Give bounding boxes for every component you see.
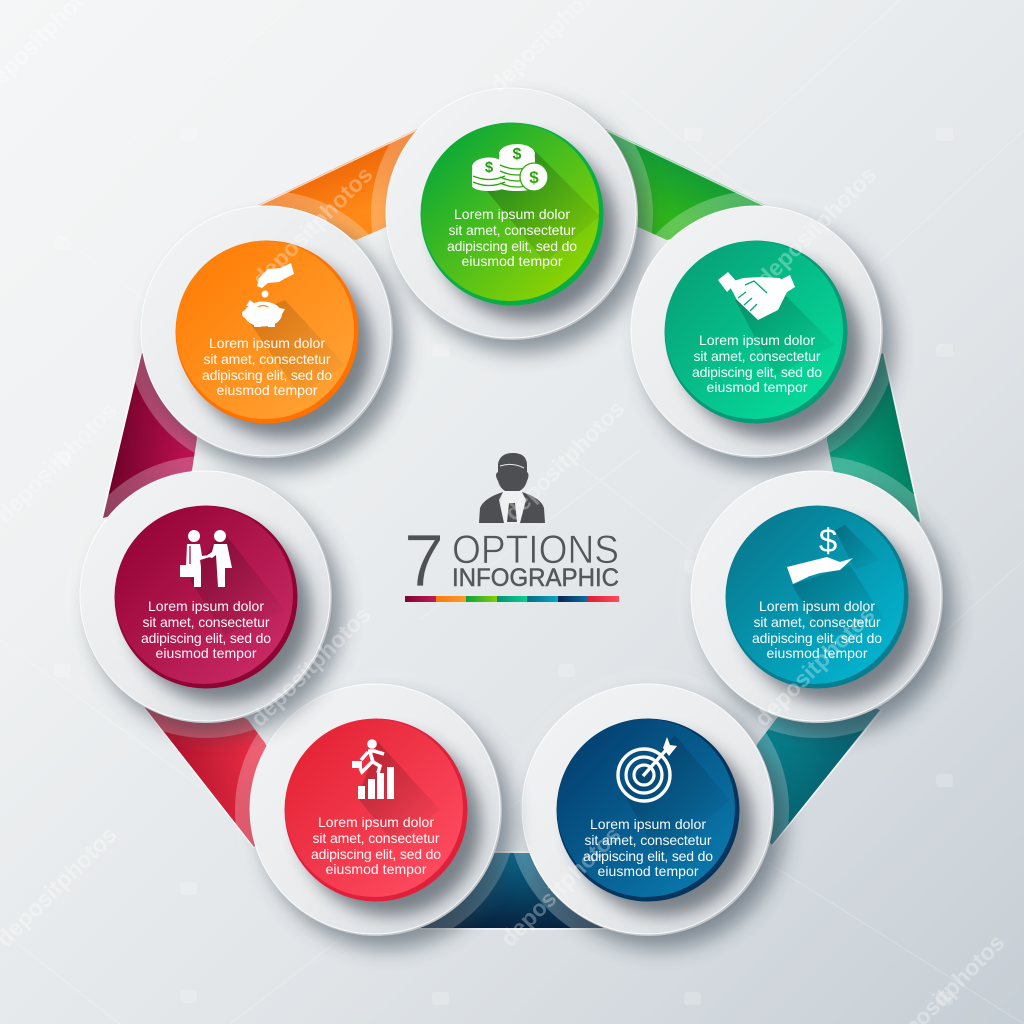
watermark: depositphotos <box>749 601 880 732</box>
ribbon: green <box>590 129 765 240</box>
icon: handshake <box>718 272 835 375</box>
text: orange: eiusmod tempor <box>216 382 318 398</box>
text: green: adipiscing elit, sed do <box>447 238 577 254</box>
text: orange: Lorem ipsum dolor <box>209 335 325 351</box>
text: crimson: sit amet, consectetur <box>142 614 270 630</box>
ribbon: teal <box>827 353 920 522</box>
ribbon: crimson <box>103 353 197 518</box>
text: cyan: eiusmod tempor <box>766 645 868 661</box>
icon: two businessmen shaking hands <box>180 530 285 635</box>
option: green money <box>386 88 649 353</box>
watermark: depositphotos <box>245 601 376 732</box>
text: teal: eiusmod tempor <box>706 379 808 395</box>
option: teal handshake <box>631 206 894 471</box>
text: red: sit amet, consectetur <box>312 830 440 846</box>
text: crimson: Lorem ipsum dolor <box>148 598 264 614</box>
icon: hand dropping coin into piggy bank <box>242 263 345 395</box>
ribbon: orange <box>258 129 440 240</box>
text: blue: Lorem ipsum dolor <box>590 816 706 832</box>
text: teal: sit amet, consectetur <box>694 348 821 364</box>
center title block <box>404 453 619 602</box>
ribbon segments of the heptagon <box>103 129 920 928</box>
icon: coin stacks: $ <box>513 146 522 163</box>
text: cyan: sit amet, consectetur <box>754 614 881 630</box>
text: crimson: adipiscing elit, sed do <box>141 630 271 646</box>
option: crimson partners <box>80 471 343 736</box>
ribbon: blue <box>420 853 610 928</box>
text: green: eiusmod tempor <box>462 253 563 269</box>
text: green: Lorem ipsum dolor <box>454 206 570 222</box>
ribbon: red <box>145 690 290 847</box>
option: red growth <box>250 684 513 949</box>
text: teal: Lorem ipsum dolor <box>699 332 815 348</box>
text: blue: adipiscing elit, sed do <box>583 848 713 864</box>
heading number: 7 <box>404 519 444 602</box>
text: orange: sit amet, consectetur <box>204 351 331 367</box>
icon: hand with dollar <box>787 522 885 640</box>
icon: running man on bars <box>352 739 440 845</box>
ribbon: cyan <box>730 690 880 845</box>
text: red: Lorem ipsum dolor <box>318 814 434 830</box>
icon: target with arrow <box>618 735 730 860</box>
colour strip <box>405 596 619 602</box>
heading: OPTIONS: OPTIONS <box>452 528 619 572</box>
icon: coin stacks <box>472 144 600 262</box>
icon: businessman <box>479 453 545 523</box>
option: orange savings <box>141 206 404 471</box>
text: cyan: Lorem ipsum dolor <box>759 598 875 614</box>
text: cyan: adipiscing elit, sed do <box>752 630 882 646</box>
text: blue: eiusmod tempor <box>598 863 699 879</box>
text: teal: adipiscing elit, sed do <box>692 364 822 380</box>
heading: INFOGRAPHIC: INFOGRAPHIC <box>452 564 619 592</box>
option: cyan giving hand <box>691 471 954 736</box>
icon: coin stacks: $ <box>529 168 539 187</box>
watermark: depositphotos <box>751 161 882 292</box>
text: red: eiusmod tempor <box>326 861 427 877</box>
text: red: adipiscing elit, sed do <box>311 846 441 862</box>
watermark: depositphotos <box>247 161 378 292</box>
text: blue: sit amet, consectetur <box>584 832 712 848</box>
option: blue target <box>522 684 785 949</box>
text: green: sit amet, consectetur <box>448 222 576 238</box>
icon: hand with dollar: $ <box>819 522 837 559</box>
watermark: depositphotos <box>499 395 630 526</box>
translucent halos on ribbons <box>103 129 920 928</box>
watermark: depositphotos <box>495 821 626 952</box>
text: orange: adipiscing elit, sed do <box>202 367 332 383</box>
icon: coin stacks: $ <box>485 159 494 176</box>
text: crimson: eiusmod tempor <box>156 645 257 661</box>
